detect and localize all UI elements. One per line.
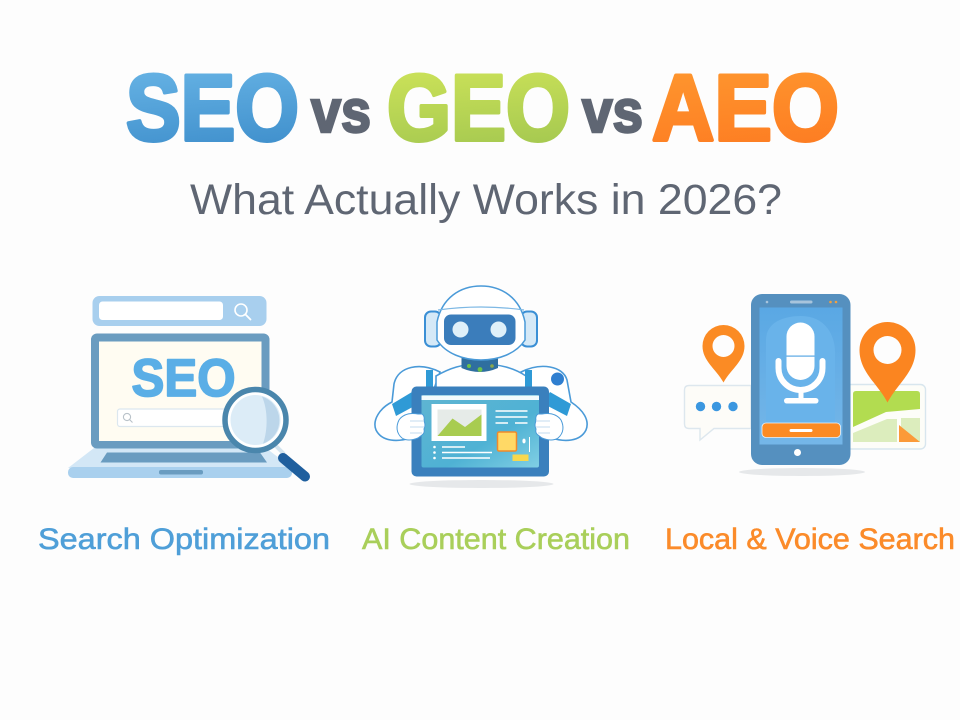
icon: AI robot with tablet [375,286,587,488]
label: Local and Voice Search: Local & Voice Search [665,523,955,556]
left map pin [702,325,744,382]
shadow [410,480,554,488]
title [126,55,839,160]
title word: SEO: SEO [126,55,299,160]
label: AI Content Creation: AI Content Creation [362,523,630,556]
subtitle: What Actually Works in 2026? [190,176,782,224]
shoulder straps [426,370,532,388]
tablet [412,386,549,476]
laptop screen [91,334,270,448]
microphone [778,322,822,404]
orange button [762,423,840,438]
SEO wordmark: SEO [132,349,236,408]
helmet band [438,307,524,310]
yellow note [498,432,516,451]
title word: AEO: AEO [652,55,839,160]
map card [845,384,926,449]
magnifying glass [225,390,305,476]
visor [444,314,516,345]
tablet image card [432,404,486,441]
tablet list dots [433,439,526,459]
robot arms [375,366,587,440]
speech bubble [684,386,751,440]
title word: vs: vs [582,78,643,145]
icon: SEO laptop [68,296,305,478]
search bar [92,296,266,326]
icon: voice and local search phone [684,294,926,476]
ear pads [425,312,537,346]
title word: vs: vs [311,78,371,145]
neck with lights [462,358,498,372]
right map pin [860,322,916,402]
phone [751,294,850,465]
title word: GEO: GEO [387,55,570,160]
left hand [397,414,425,440]
shadow [739,468,865,476]
tablet text lines [442,411,530,458]
yellow tag [512,454,528,461]
helmet [437,286,525,360]
label: Search Optimization: Search Optimization [38,523,330,556]
right hand [535,414,563,440]
robot torso [436,364,526,390]
laptop base [68,448,292,478]
small search field [118,409,228,426]
